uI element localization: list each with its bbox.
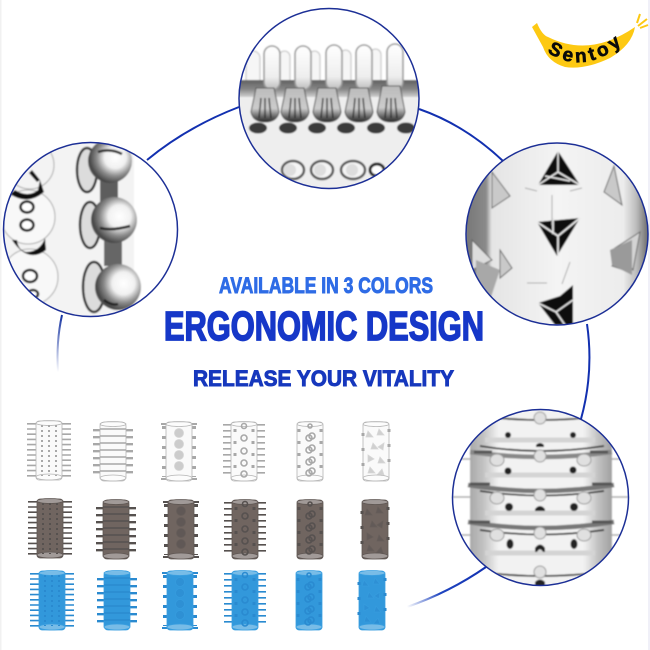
bottom triangle [538, 285, 573, 325]
circle: pillar sleeve detail [239, 8, 419, 190]
top triangle [538, 151, 580, 185]
circle: beaded sleeve detail [0, 139, 180, 320]
product row: clear sleeves [32, 420, 389, 481]
circle: triangle sleeve detail [466, 143, 649, 326]
subheading: available colors: AVAILABLE IN 3 COLORS [219, 273, 433, 298]
tagline: RELEASE YOUR VITALITY [193, 366, 454, 391]
connector arcs [58, 107, 589, 607]
product row: smoke sleeves [33, 498, 388, 559]
circle: ridged sleeve detail [452, 409, 630, 587]
product row: blue sleeves [35, 570, 385, 630]
logo: Sentoy banana: Sentoy [548, 36, 620, 63]
middle triangle [537, 218, 580, 256]
logo: Sentoy banana [532, 14, 648, 68]
title: ERGONOMIC DESIGN [164, 303, 484, 349]
